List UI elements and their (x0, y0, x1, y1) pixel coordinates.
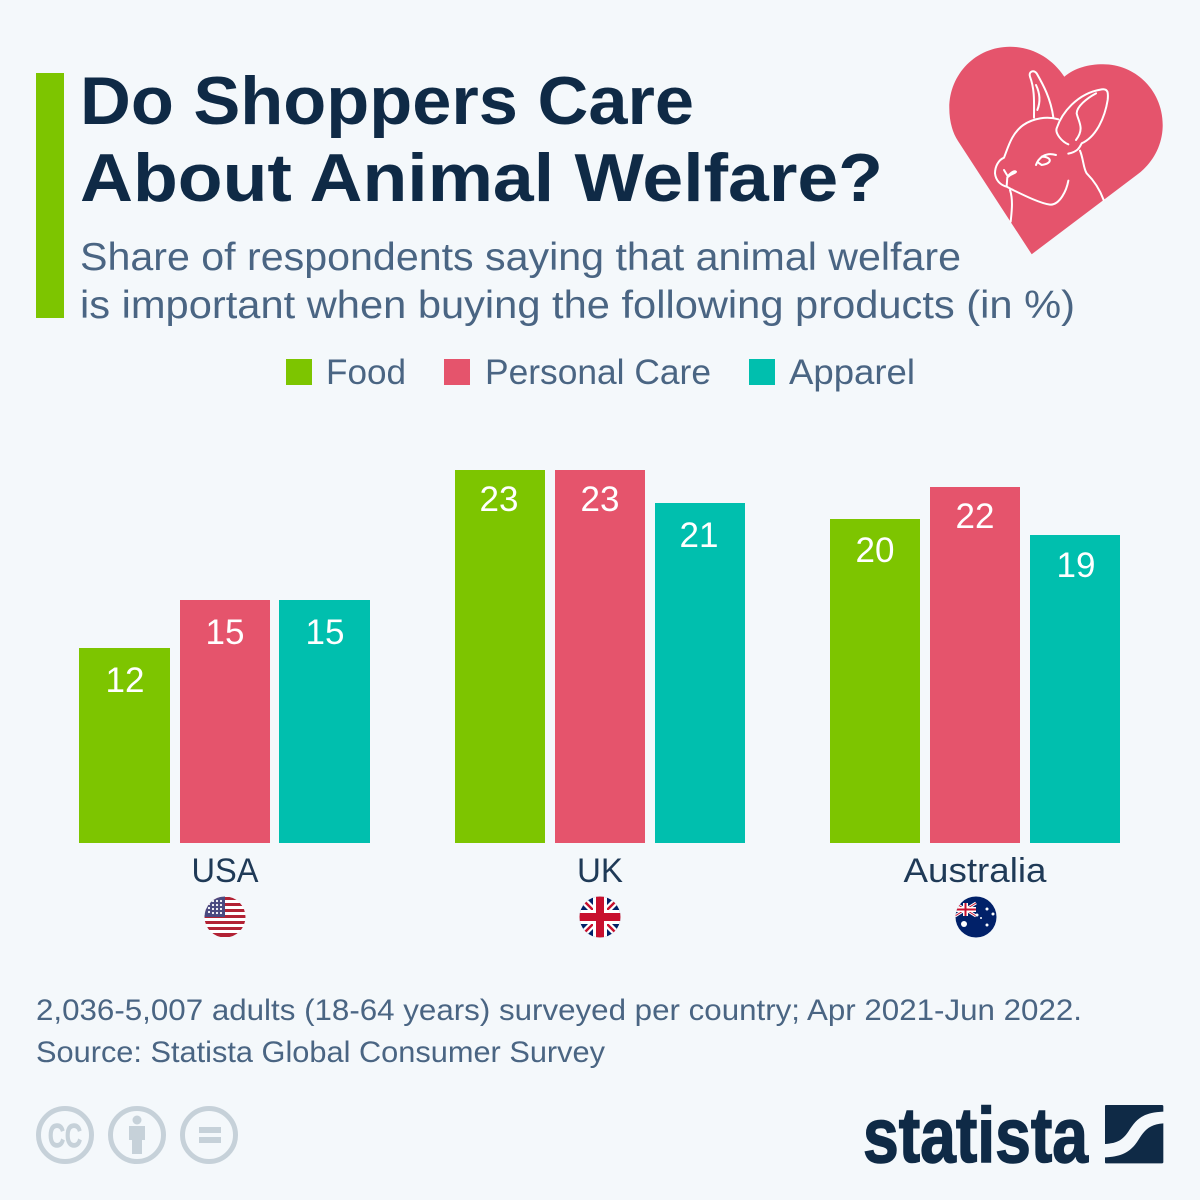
icon: creative commons: CC (48, 1117, 82, 1154)
bar chart (79, 470, 1120, 843)
country labels: UK (577, 852, 623, 890)
bars: UK: 23 (480, 480, 518, 519)
bars: USA (79, 600, 370, 843)
footer note and source: Source: Statista Global Consumer Survey (36, 1036, 605, 1069)
bars: Australia (830, 487, 1120, 843)
icon: USA flag (204, 896, 246, 938)
statista wordmark: statista (863, 1091, 1089, 1179)
icon: Australia flag (955, 896, 997, 938)
legend: food: Food (326, 353, 406, 392)
icon: heart with rabbit (949, 47, 1163, 254)
legend: apparel: Apparel (789, 353, 915, 392)
icon: UK flag (579, 896, 621, 938)
statista logo mark (1105, 1105, 1163, 1163)
bars: UK: 21 (680, 516, 718, 555)
bars: Australia: 22 (956, 497, 994, 536)
bars: Australia: 19 (1057, 546, 1095, 585)
footer note and source: 2,036-5,007 adults (18-64 years) surveyed per country; Apr 2021-Jun 2022. (36, 994, 1082, 1027)
country labels (192, 852, 1047, 890)
icon: no derivatives (182, 1108, 236, 1162)
title: About Animal Welfare? (80, 140, 883, 216)
country labels: USA (192, 852, 259, 890)
legend: food (286, 353, 406, 392)
country labels: Australia (904, 852, 1047, 890)
bars: USA: 12 (106, 661, 144, 700)
bars: USA: 15 (206, 613, 244, 652)
icon: creative commons (38, 1108, 92, 1162)
legend: personal care: Personal Care (485, 353, 711, 392)
accent bar (36, 73, 64, 318)
bars: USA: 15 (306, 613, 344, 652)
footer note and source (36, 994, 1082, 1069)
subtitle (80, 236, 1075, 327)
bars: UK: 23 (581, 480, 619, 519)
subtitle: is important when buying the following products (in %) (80, 284, 1075, 327)
subtitle: Share of respondents saying that animal welfare (80, 236, 961, 279)
bars: UK (455, 470, 745, 843)
title (80, 63, 883, 216)
icon: attribution (110, 1108, 164, 1162)
legend (286, 353, 915, 392)
bars: Australia: 20 (856, 531, 894, 570)
title: Do Shoppers Care (80, 63, 694, 139)
